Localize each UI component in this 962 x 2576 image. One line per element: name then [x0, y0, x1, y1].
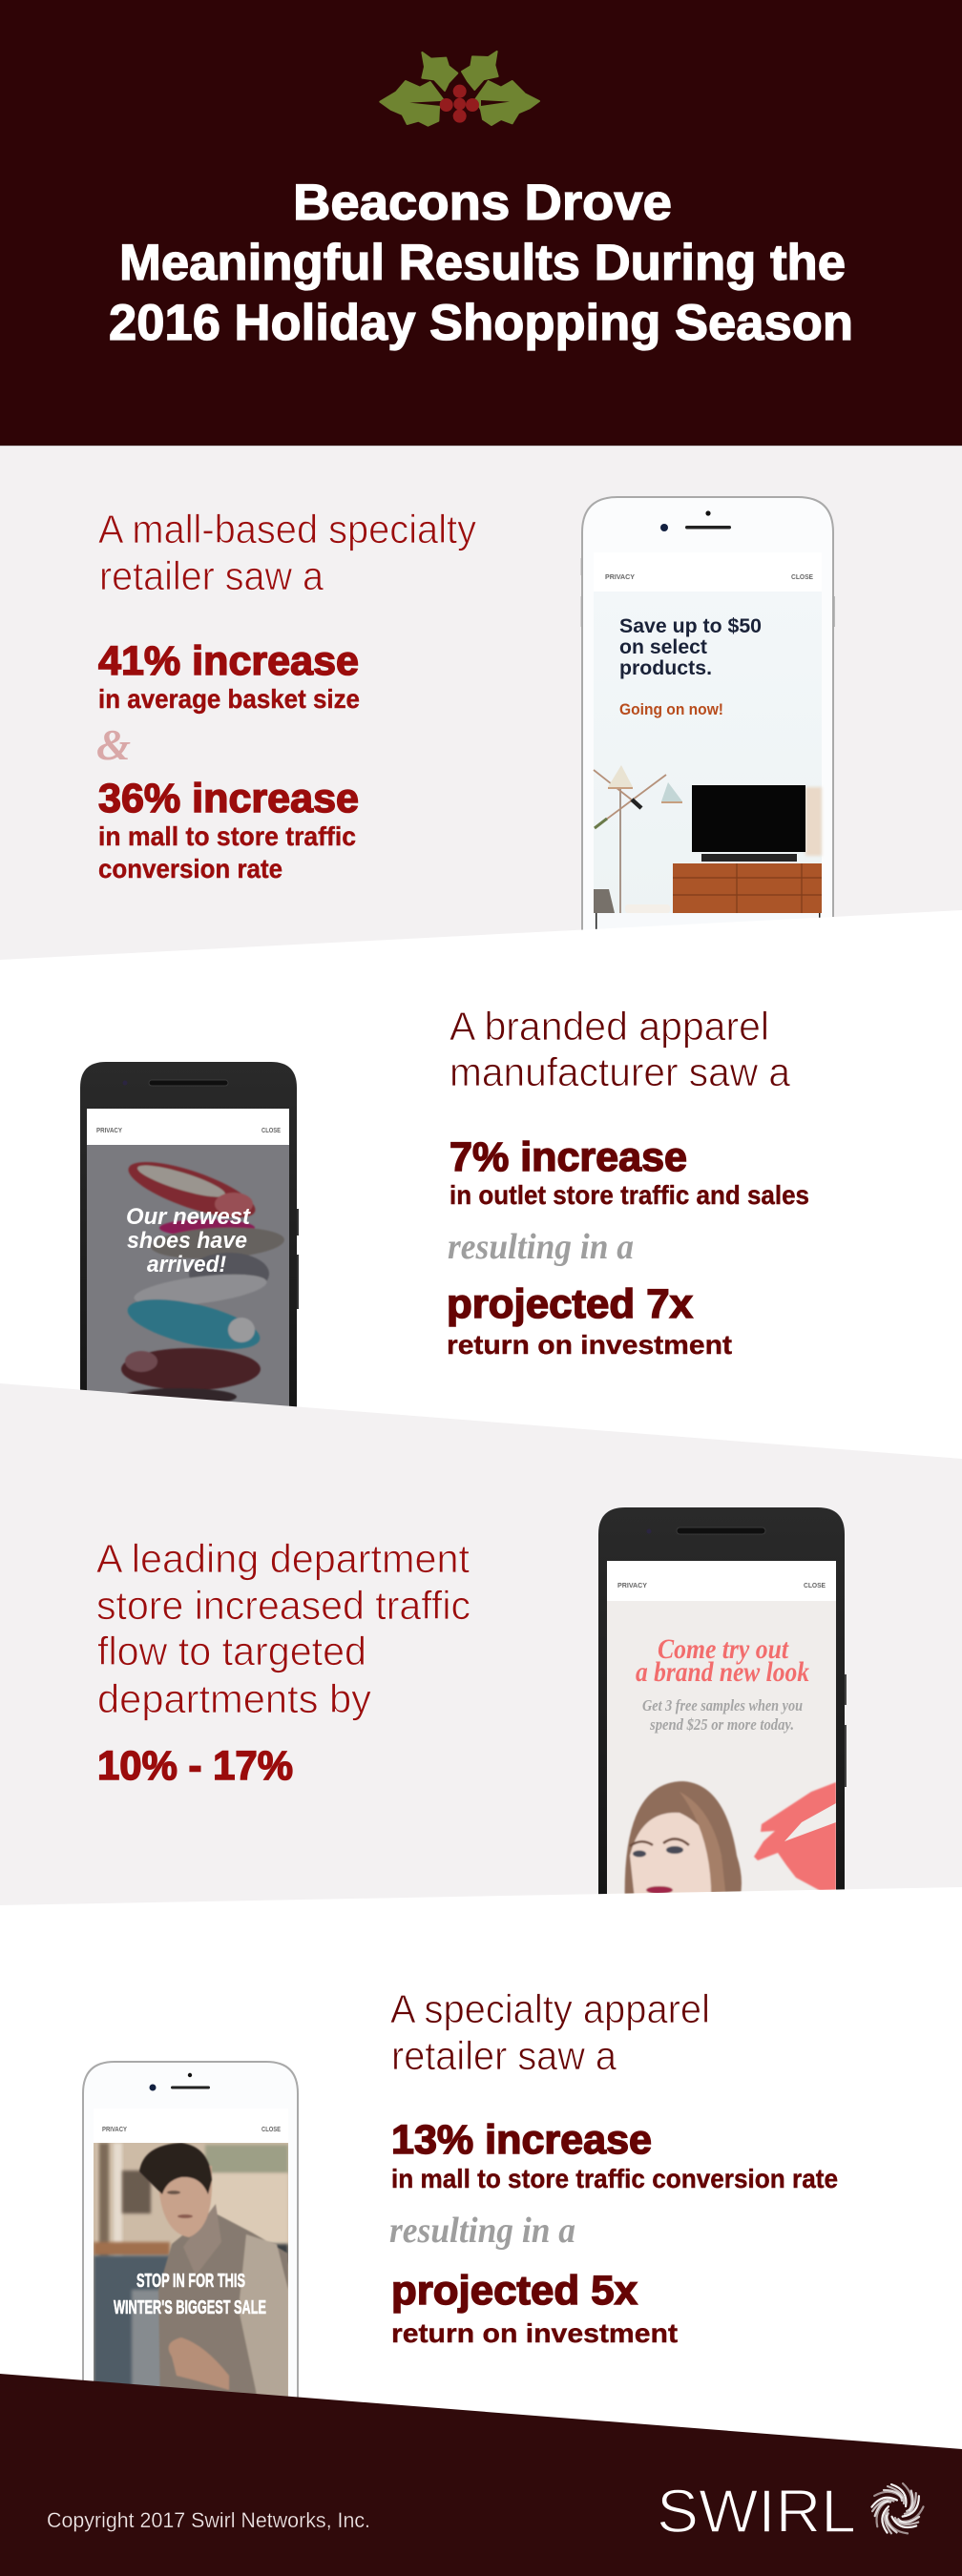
phone: white phone with winter sale ad — [83, 2062, 298, 2420]
stat: projected 5x: projected 5x — [391, 2268, 638, 2314]
illustration: model and lipstick swatch — [624, 1780, 836, 1894]
heading: leading department store: flow to targeted — [97, 1629, 366, 1673]
phone: dark phone with shoes ad: CLOSE — [261, 1128, 281, 1134]
heading: branded apparel manufacturer: A branded apparel — [450, 1004, 769, 1049]
phone: dark phone with shoes ad: PRIVACY — [96, 1128, 122, 1134]
phone: white phone with TV ad: CLOSE — [791, 574, 813, 581]
panel: header — [0, 0, 962, 446]
heading: leading department store: departments by — [97, 1676, 371, 1721]
panel: leading department store — [0, 1383, 962, 1927]
stat: 36% increase: conversion rate — [98, 854, 282, 883]
heading: specialty apparel retailer — [390, 1986, 710, 2078]
stat: projected 7x: return on investment — [447, 1330, 732, 1360]
heading: mall-based specialty retailer: A mall-based specialty — [98, 507, 476, 551]
phone: white phone with TV ad: on select — [619, 636, 707, 658]
title: Meaningful Results During the — [119, 235, 846, 291]
heading: specialty apparel retailer: retailer saw a — [391, 2033, 617, 2078]
phone: white phone with winter sale ad: STOP IN FOR THIS — [136, 2271, 245, 2292]
illustration: stacked shoes — [121, 1151, 285, 1405]
heading: branded apparel manufacturer: manufacturer saw a — [450, 1049, 791, 1094]
phone: dark phone with beauty ad: CLOSE — [804, 1583, 826, 1589]
stat: 13% increase — [391, 2117, 838, 2193]
phone: white phone with TV ad: products. — [619, 657, 712, 679]
heading: mall-based specialty retailer: retailer saw a — [99, 553, 324, 598]
stat: 7% increase: 7% increase — [450, 1134, 687, 1180]
heading: specialty apparel retailer: A specialty apparel — [390, 1986, 710, 2031]
icon: holly — [380, 52, 539, 126]
stat: 41% increase — [98, 638, 360, 714]
stat: 13% increase: in mall to store traffic conversion rate — [391, 2164, 838, 2193]
stat: projected 5x: return on investment — [391, 2318, 678, 2348]
panel: mall-based specialty retailer — [0, 446, 962, 983]
stat: 36% increase: in mall to store traffic — [98, 821, 356, 851]
stat: 36% increase: 36% increase — [98, 776, 359, 821]
phone: dark phone with shoes ad: arrived! — [147, 1252, 226, 1278]
photo: man in sweater — [94, 2143, 288, 2420]
phone: dark phone with beauty ad — [598, 1507, 847, 1918]
illustration: living room — [594, 765, 822, 913]
phone: dark phone with beauty ad: a brand new look — [636, 1656, 809, 1688]
phone: white phone with winter sale ad: PRIVACY — [102, 2127, 127, 2133]
stat: 7% increase: in outlet store traffic and sales — [450, 1180, 809, 1210]
connector: resulting in a: resulting in a — [448, 1227, 634, 1267]
connector: resulting in a: resulting in a — [389, 2211, 575, 2251]
phone: dark phone with beauty ad: Come try out — [658, 1633, 789, 1665]
phone: white phone with TV ad: Going on now! — [619, 700, 723, 718]
phone: dark phone with shoes ad: shoes have — [127, 1228, 247, 1254]
phone: white phone with TV ad: PRIVACY — [605, 574, 635, 581]
heading: branded apparel manufacturer — [450, 1004, 791, 1094]
phone: white phone with winter sale ad: WINTER'S BIGGEST SALE — [114, 2297, 266, 2318]
heading: leading department store: store increased traffic — [96, 1583, 471, 1628]
phone: dark phone with beauty ad: spend $25 or more today. — [649, 1715, 794, 1734]
phone: dark phone with shoes ad — [80, 1062, 299, 1422]
heading: leading department store — [96, 1536, 471, 1721]
panel: specialty apparel retailer — [0, 1887, 962, 2397]
logo: SWIRL wordmark: SWIRL — [657, 2477, 856, 2545]
title: 2016 Holiday Shopping Season — [109, 295, 853, 351]
ampersand: & — [96, 720, 131, 769]
stat: projected 7x: projected 7x — [447, 1281, 693, 1327]
stat: 36% increase — [98, 776, 359, 883]
title: Beacons Drove — [293, 175, 672, 231]
copyright: Copyright 2017 Swirl Networks, Inc. — [47, 2508, 370, 2532]
phone: white phone with TV ad: Save up to $50 — [619, 615, 762, 637]
stat: 41% increase: 41% increase — [98, 638, 359, 684]
stat: projected 7x — [447, 1281, 732, 1360]
phone: dark phone with shoes ad: Our newest — [126, 1204, 251, 1230]
stat: projected 5x — [391, 2268, 678, 2348]
phone: dark phone with beauty ad: Get 3 free samples when you — [642, 1696, 803, 1714]
phone: white phone with TV ad — [580, 497, 835, 983]
panel: footer — [0, 2374, 962, 2576]
heading: mall-based specialty retailer — [98, 507, 476, 598]
stat: 13% increase: 13% increase — [391, 2117, 652, 2163]
heading: leading department store: A leading department — [96, 1536, 470, 1581]
panel: branded apparel manufacturer — [0, 910, 962, 1406]
phone: dark phone with beauty ad: PRIVACY — [617, 1583, 647, 1589]
phone: white phone with winter sale ad: CLOSE — [261, 2127, 281, 2133]
icon: swirl — [868, 2483, 926, 2539]
stat: 7% increase — [450, 1134, 809, 1210]
title — [109, 175, 853, 351]
stat: 10% - 17%: 10% - 17% — [97, 1743, 293, 1789]
stat: 41% increase: in average basket size — [98, 684, 360, 714]
